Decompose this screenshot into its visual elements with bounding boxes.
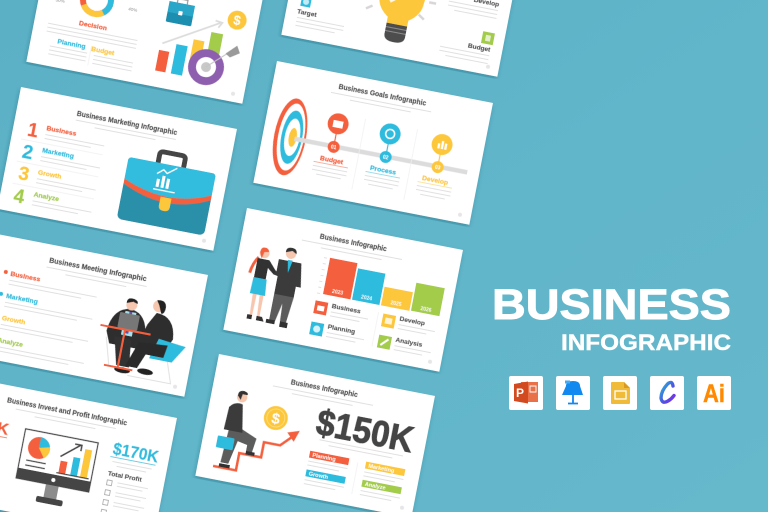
budget block <box>439 24 495 64</box>
step 2: process: 02 <box>382 155 389 161</box>
icon: Google Slides <box>603 376 637 410</box>
legend: business <box>313 300 370 324</box>
list item 4: Analyze <box>33 191 60 203</box>
step 1: budget: 01 <box>330 144 337 151</box>
develop block <box>447 0 500 18</box>
list item 4: 4 <box>12 186 27 209</box>
icon: Canva <box>650 376 684 410</box>
pie chart <box>26 435 52 461</box>
list item 1: Business <box>46 125 77 138</box>
title: Business Infographic <box>319 232 388 253</box>
decision block <box>47 14 139 48</box>
budget block: Budget <box>91 46 116 57</box>
icon: small briefcase <box>166 0 196 27</box>
total profit list: Total Profit <box>107 470 143 484</box>
icon: dollar coin: $ <box>270 410 282 428</box>
icon: large briefcase <box>117 146 218 236</box>
target block: Target <box>296 8 318 19</box>
title: Business Infographic <box>290 377 359 399</box>
list item 2: 2 <box>20 142 35 164</box>
slide: business chart <box>223 208 463 372</box>
slide: business marketing <box>0 87 237 251</box>
decision block: Decision <box>78 20 108 32</box>
slide: business meeting <box>0 233 208 397</box>
legend: planning: Planning <box>327 324 356 336</box>
icon: light bulb <box>361 0 441 49</box>
arrow: growth steps <box>213 416 300 481</box>
title <box>301 228 404 263</box>
illustration: businessman climbing <box>212 388 266 473</box>
tag: analyze <box>360 480 402 502</box>
heading: BUSINESS: BUSINESS <box>492 281 731 329</box>
planning block: Planning <box>57 38 86 51</box>
list item 2 <box>20 142 102 177</box>
bar chart: 2025 <box>390 300 402 308</box>
timeline line <box>294 139 467 172</box>
list: business: Business <box>10 271 41 284</box>
icon: Keynote <box>556 376 590 410</box>
percent labels <box>55 0 138 18</box>
step 3: develop <box>415 131 462 200</box>
legend: analysis <box>377 334 432 358</box>
list item 4 <box>12 186 94 222</box>
slide: $150K <box>195 354 435 512</box>
step 2: process: Process <box>369 165 397 177</box>
tag: planning <box>307 451 349 473</box>
planning block <box>48 37 89 61</box>
icon: Adobe Illustrator: Ai <box>703 380 725 408</box>
title: Business Marketing Infographic <box>76 109 178 137</box>
tag: growth <box>304 469 346 491</box>
illustration: two men at a table <box>92 290 194 385</box>
list item 1 <box>26 120 106 155</box>
chart: monitor <box>12 429 99 511</box>
list item 2: Marketing <box>42 147 74 160</box>
list: marketing: Marketing <box>6 293 38 306</box>
title: Business Invest and Profit Infographic <box>6 395 128 427</box>
list item 1: 1 <box>26 120 40 142</box>
list: growth <box>0 314 90 345</box>
icon: dollar coin <box>226 9 248 31</box>
slide: idea bulb (top center) <box>281 0 521 77</box>
tag: marketing: Marketing <box>368 464 395 475</box>
value: $170K: $170K <box>111 439 161 467</box>
step 1: budget <box>311 110 358 180</box>
list: business <box>2 270 98 301</box>
legend: planning <box>309 320 366 345</box>
bar chart <box>317 257 446 317</box>
icon: chart on briefcase <box>153 165 179 193</box>
icon: Adobe Illustrator <box>697 376 731 410</box>
heading: INFOGRAPHIC: INFOGRAPHIC <box>561 330 731 355</box>
tag: marketing <box>363 462 405 483</box>
title: Business Goals Infographic <box>338 82 427 108</box>
total profit list <box>100 470 150 512</box>
tag: analyze: Analyze <box>364 482 386 492</box>
donut chart <box>81 0 113 16</box>
tag: growth: Growth <box>308 471 329 481</box>
target block <box>295 0 348 34</box>
slide: business goals <box>253 61 493 225</box>
slide: decision chart (top left) <box>26 0 266 104</box>
budget block: Budget <box>467 43 492 54</box>
bar chart <box>155 23 223 82</box>
icon: target <box>267 96 313 178</box>
step 3: develop: 03 <box>434 165 441 172</box>
legend: develop: Develop <box>399 316 425 327</box>
title <box>272 374 375 409</box>
legend: analysis: Analysis <box>395 337 423 349</box>
step 2: process <box>363 120 410 190</box>
step 3: develop: Develop <box>421 175 449 187</box>
icon: dollar coin: $ <box>232 12 243 28</box>
illustration: handshake <box>241 241 308 329</box>
step 1: budget: Budget <box>319 155 344 167</box>
title: Business Meeting Infographic <box>49 256 147 283</box>
legend: business: Business <box>331 303 362 316</box>
icon: dollar coin <box>262 404 290 432</box>
list item 3 <box>17 163 98 199</box>
growth arrow <box>162 11 223 54</box>
icon: PowerPoint: P <box>516 386 524 400</box>
list item 3: Growth <box>37 169 62 181</box>
icon: target and dart <box>190 38 241 87</box>
icon: PowerPoint <box>509 376 543 410</box>
legend: develop <box>381 312 437 337</box>
slide: invest and profit <box>0 376 177 512</box>
tag: planning: Planning <box>312 453 337 463</box>
list: marketing <box>0 292 94 323</box>
value: $150K: $150K <box>313 401 417 460</box>
list item 3: 3 <box>17 163 31 186</box>
list: growth: Growth <box>1 315 26 326</box>
bars <box>56 444 94 479</box>
bar chart: 2023 <box>331 289 344 297</box>
bar chart: 2026 <box>420 306 432 314</box>
bar chart: 2024 <box>360 294 373 302</box>
percent labels: 40% <box>128 6 138 13</box>
list: analyze <box>0 336 86 367</box>
budget block <box>89 46 135 71</box>
